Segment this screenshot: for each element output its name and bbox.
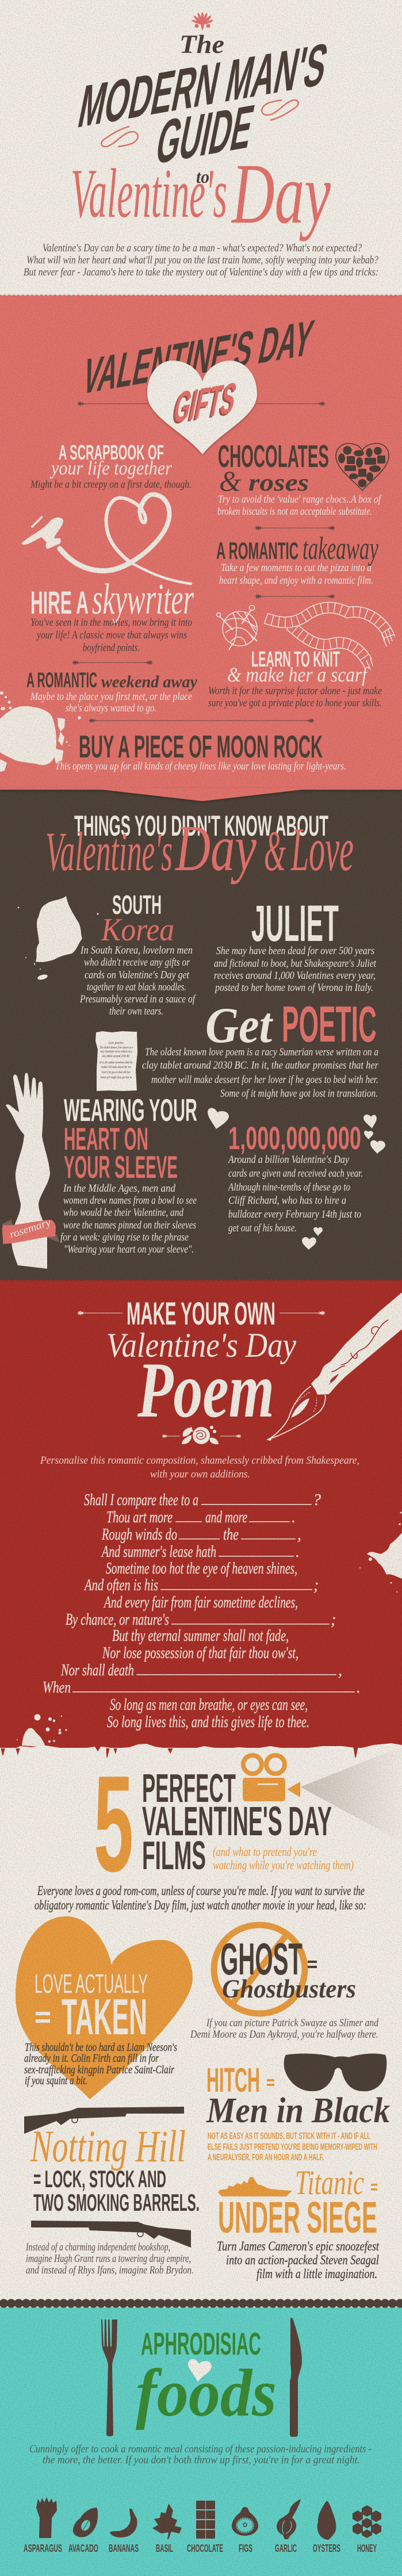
film: Love Actually: [16, 1916, 193, 2099]
item: romantic weekend: she's always wanted to go.: [66, 702, 156, 714]
film: Hitch: A NEURALYSER. FOR AN HOUR AND A HALF.: [208, 2153, 324, 2162]
subtitle: watching while you're watching them): [213, 1858, 354, 1872]
item: skywriter: boyfriend points.: [83, 642, 140, 654]
item: scrapbook: Might be a bit creepy on a first date, though.: [30, 479, 192, 491]
item: South Korea: In South Korea, lovelorn men: [80, 944, 193, 956]
icon: moon rock: [0, 691, 81, 772]
icon: left swash: [101, 127, 138, 147]
text: chocolates: [217, 493, 382, 518]
icon: left ink splatter: [17, 1714, 67, 1747]
heading: Valentine's Day: Valentine's Day: [106, 1326, 296, 1364]
text: [29, 2443, 372, 2466]
food: chocolate: [187, 2501, 223, 2554]
icon: rosemary ribbon: rosemary: [8, 1216, 52, 1241]
film: Titanic: Titanic: [295, 2164, 364, 2202]
poem: Nor shall death: [60, 1662, 134, 1679]
icon: film camera: [243, 1755, 300, 1801]
divider: [89, 718, 315, 724]
item: heart on your sleeve: WEARING YOUR: [64, 1092, 197, 1128]
item: romantic takeaway: [216, 531, 378, 587]
food: asparagus: ASPARAGUS: [24, 2543, 62, 2554]
icon: palmette ornament: [191, 12, 214, 30]
item: South Korea: who didn't receive any gifts or: [84, 956, 190, 969]
poem: the: [223, 1526, 239, 1544]
film: Hitch: Men in Black: [206, 2091, 390, 2130]
poem: Rough winds do: [101, 1526, 177, 1544]
item: romantic weekend: A ROMANTIC: [26, 668, 97, 692]
panel: aphrodisiac foods: [0, 2299, 402, 2576]
icon: fork: [101, 2319, 117, 2436]
film: Notting Hill: = LOCK, STOCK AND: [33, 2165, 166, 2192]
poem: And often is his: [84, 1576, 158, 1594]
film: Love Actually: if you squint a bit.: [25, 2074, 87, 2087]
icon: clay tablet: clay tablet around 2030 BC.: [102, 1054, 131, 1058]
item: romantic weekend: [26, 668, 198, 714]
poem: And summer's lease hath: [101, 1543, 216, 1561]
item: one billion: Around a billion Valentine's Day: [227, 1154, 349, 1166]
food: garlic: GARLIC: [275, 2543, 297, 2554]
film: Titanic: [217, 2164, 379, 2281]
poem: By chance, or nature's: [66, 1611, 169, 1629]
icon: clay tablet: In it, the author promises that her: [99, 1061, 133, 1065]
icon: heart: [188, 2359, 212, 2382]
item: chocolates heading: &: [219, 465, 241, 497]
poem: ;: [331, 1611, 336, 1629]
item: South Korea: [79, 890, 196, 1017]
title: Guide: GUIDE: [151, 92, 259, 178]
text: Notting Hill: imagine Hugh Grant runs a towering drug empire,: [26, 2253, 191, 2265]
item: South Korea: cards on Valentine's Day get: [85, 969, 190, 981]
item: heart on your sleeve: HEART ON: [64, 1121, 148, 1157]
item: South Korea: together to eat black noodles.: [87, 981, 186, 993]
panel: things you didn't know: [0, 788, 402, 1280]
food: basil: BASIL: [156, 2543, 173, 2554]
poem: And every fair from fair sometime declines,: [104, 1594, 298, 1612]
icon: right ink splatter: [359, 1511, 402, 1593]
item: Juliet: [214, 894, 377, 994]
item: South Korea: Korea: [101, 912, 174, 948]
icon: fountain pen: [268, 1292, 402, 1440]
item: scrapbook: your life together: [49, 458, 173, 479]
heading: foods: foods: [136, 2355, 277, 2430]
poem: Sometime too hot the eye of heaven shines,: [106, 1560, 297, 1578]
icon: clay tablet: mother will make dessert for her: [101, 1065, 131, 1069]
film: Love Actually: TAKEN: [62, 1988, 147, 2045]
heading dividers: [77, 1310, 326, 1316]
film: Notting Hill: [30, 2121, 200, 2216]
heading: [142, 1766, 332, 1878]
text: Notting Hill: [25, 2241, 194, 2276]
item: skywriter: your life! A classic move that always wins: [36, 629, 187, 641]
heading script: [45, 812, 354, 885]
food: chocolate: CHOCOLATE: [187, 2543, 223, 2554]
text: personalise: Personalise this romantic composition, shamelessly cribbed from Shakespeare,: [40, 1454, 359, 1467]
film: Love Actually: already in it. Colin Firth can fill in for: [24, 2052, 159, 2065]
food: bananas: [109, 2509, 139, 2554]
text: personalise: with your own additions.: [150, 1468, 250, 1480]
food: avocado: AVACADO: [68, 2543, 98, 2554]
text: personalise: [40, 1454, 359, 1480]
subtitle: [213, 1844, 354, 1872]
item: heart on your sleeve: In the Middle Ages, men and: [63, 1182, 175, 1195]
item: South Korea: their own tears.: [109, 1005, 163, 1017]
food: figs: [232, 2507, 258, 2554]
poem: So long as men can breathe, or eyes can see,: [110, 1696, 308, 1714]
projector beam: [300, 1747, 402, 1842]
heading script: Day: [175, 812, 256, 885]
item: chocolates heading: [218, 438, 329, 497]
poem: ?: [313, 1491, 321, 1509]
poem: and more: [205, 1509, 247, 1526]
item: learn to knit: [208, 648, 382, 709]
item: chocolates heading: roses: [248, 470, 309, 496]
text: the more, the better. If you don't both throw up first, you're in for a great night.: [43, 2454, 360, 2466]
icon: plane: [21, 516, 63, 549]
poem: When: [43, 1679, 71, 1697]
item: skywriter: skywriter: [92, 575, 194, 623]
food: bananas: BANANAS: [109, 2543, 139, 2554]
food: honey: [353, 2505, 381, 2554]
food: garlic: [275, 2499, 301, 2554]
panel: five films: [0, 1743, 402, 2300]
item: heart on your sleeve: for a week: giving rise to the phrase: [60, 1231, 189, 1243]
item: Get Poetic: Get: [205, 998, 273, 1054]
title word: to: to: [196, 166, 209, 187]
icon: rose with dividers: [162, 1426, 242, 1444]
poem: Thou art more: [106, 1509, 173, 1526]
icon: right swash: [262, 100, 298, 120]
poem: .: [292, 1509, 296, 1526]
item: one billion: Although nine-tenths of these go to: [227, 1181, 350, 1193]
film: Notting Hill: TWO SMOKING BARRELS.: [33, 2189, 200, 2216]
divider: [255, 526, 335, 530]
poem: So long lives this, and this gives life to thee.: [107, 1713, 309, 1731]
icon: clay tablet: lover if he goes to bed with her.: [102, 1070, 131, 1074]
item: heart on your sleeve: who would be their Valentine, and: [63, 1207, 183, 1219]
item: romantic weekend: weekend away: [101, 672, 198, 691]
item: romantic takeaway: A ROMANTIC: [216, 537, 298, 564]
intro text: [24, 242, 378, 278]
item: scrapbook: A SCRAPBOOK OF: [59, 441, 164, 464]
title: Day: Day: [231, 146, 331, 242]
text: Notting Hill: and instead of Rhys Ifans, imagine Rob Brydon.: [26, 2264, 194, 2276]
poem: ,: [297, 1526, 301, 1544]
item: one billion: [227, 1120, 363, 1234]
poem: [43, 1491, 361, 1731]
heading: Gifts: GIFTS: [170, 373, 240, 432]
item: skywriter: [30, 575, 194, 654]
poem: Shall I compare thee to a: [84, 1491, 198, 1509]
food: oysters: OYSTERS: [313, 2543, 340, 2554]
heading: Poem: Poem: [137, 1346, 274, 1434]
food: figs: FIGS: [239, 2543, 252, 2554]
text: Notting Hill: Instead of a charming independent bookshop,: [25, 2241, 170, 2253]
icon: skywriting heart trail: [60, 495, 191, 584]
heart: [147, 361, 257, 454]
icon: map of South Korea: [18, 896, 99, 981]
film: Ghost: [190, 1925, 378, 2041]
film: Love Actually: sex-trafficking kingpin Patrice Saint-Clair: [24, 2064, 174, 2076]
item: one billion: get out of his house.: [228, 1222, 297, 1234]
icon: rosemary ribbon: [2, 1216, 59, 1244]
food: oysters: [313, 2501, 340, 2554]
item: romantic takeaway: Take a few moments to cut the pizza into a: [221, 562, 372, 574]
item: heart on your sleeve: women drew names from a bowl to see: [63, 1195, 197, 1207]
item: skywriter: You've seen it in the movies, now bring it into: [30, 617, 192, 629]
item: heart on your sleeve: [60, 1092, 197, 1256]
icon: box of chocolates: [336, 443, 389, 491]
poem: ,: [338, 1662, 342, 1679]
item: heart on your sleeve: "Wearing your heart on your sleeve".: [64, 1243, 194, 1256]
icon: clay tablet: racy Sumerian verse written on a: [100, 1050, 132, 1054]
film: Love Actually: This shouldn't be too hard as Liam Neeson's: [25, 2041, 177, 2054]
panel: gifts: [0, 291, 402, 794]
item: heart on your sleeve: wore the names pinned on their sleeves: [63, 1219, 196, 1231]
item: Juliet: She may have been dead for over 500 years: [216, 945, 374, 957]
heading: Gifts shadow: GIFTS: [169, 375, 239, 434]
item: South Korea: SOUTH: [112, 890, 162, 920]
item: moon rock: [55, 729, 346, 772]
poem: .: [296, 1543, 300, 1561]
heading: MAKE YOUR OWN: [127, 1295, 275, 1331]
heading script: Valentine's: [45, 821, 173, 882]
coral chevron: [0, 788, 402, 801]
food: honey: HONEY: [357, 2543, 377, 2554]
item: skywriter: HIRE A: [30, 584, 89, 621]
item: scrapbook: [30, 441, 192, 491]
icon: clay tablet: Some of it might have got lost in: [101, 1075, 132, 1080]
item: Get Poetic: [142, 996, 379, 1100]
poem: .: [357, 1679, 361, 1697]
poem: But thy eternal summer shall not fade,: [112, 1627, 289, 1645]
divider: [72, 660, 153, 665]
food: asparagus: [24, 2497, 62, 2554]
icon: ball of yarn: [216, 605, 257, 650]
food: basil: [152, 2504, 182, 2554]
film: Notting Hill: Notting Hill: [30, 2121, 186, 2171]
item: one billion: bulldozer every February 14th just to: [228, 1208, 361, 1220]
icon: clay tablet: The oldest known love poem is a: [99, 1046, 133, 1050]
film: Ghost: GHOST: [220, 1934, 303, 1984]
icon: clay tablet: Get poetic: [109, 1041, 124, 1045]
panel: make your own poem: [0, 1276, 402, 1748]
item: one billion: cards are given and received each year.: [228, 1168, 363, 1180]
icon: hearts: [208, 1108, 385, 1250]
torn edge drips: [1, 1746, 358, 1758]
film: Love Actually: LOVE ACTUALLY: [35, 1969, 148, 1999]
item: Juliet: posted to her home town of Verona in Italy.: [214, 982, 373, 994]
film: Hitch: HITCH: [206, 2061, 260, 2099]
icon: knife: [290, 2318, 302, 2437]
item: one billion: Cliff Richard, who has to hire a: [228, 1195, 346, 1207]
item: learn to knit: & make her a scarf: [227, 663, 369, 686]
poem: ;: [313, 1576, 319, 1594]
heading script: &: [264, 819, 286, 883]
film: Ghost: Ghostbusters: [222, 1974, 356, 2003]
food: avocado: [68, 2508, 98, 2554]
intro text: [35, 1884, 366, 1912]
divider: [255, 594, 335, 599]
heading: FILMS: [142, 1833, 206, 1878]
title word: The: The: [179, 29, 224, 59]
panel: intro: [0, 0, 402, 294]
number five: 5: [94, 1748, 133, 1900]
heading: PERFECT: [142, 1766, 236, 1811]
item: South Korea: Presumably served in a sauce of: [79, 993, 196, 1005]
icon: clay tablet: [95, 1031, 137, 1091]
item: heart on your sleeve: YOUR SLEEVE: [64, 1149, 178, 1185]
icon: scarf: [266, 607, 392, 671]
title: Valentine's: Valentine's: [71, 155, 227, 232]
heading divider: [77, 401, 326, 406]
subtitle: (and what to pretend you're: [213, 1844, 317, 1859]
item: romantic weekend: Maybe to the place you first met, or the place: [30, 691, 192, 703]
icon: shotgun bottom: [31, 2221, 191, 2248]
heading: APHRODISIAC: [141, 2326, 261, 2361]
icon: arm: [6, 1073, 50, 1269]
icon: shotgun top: [24, 2107, 184, 2134]
poem: Nor lose possession of that fair thou ow'st,: [102, 1644, 298, 1662]
film: Hitch: [206, 2054, 390, 2162]
